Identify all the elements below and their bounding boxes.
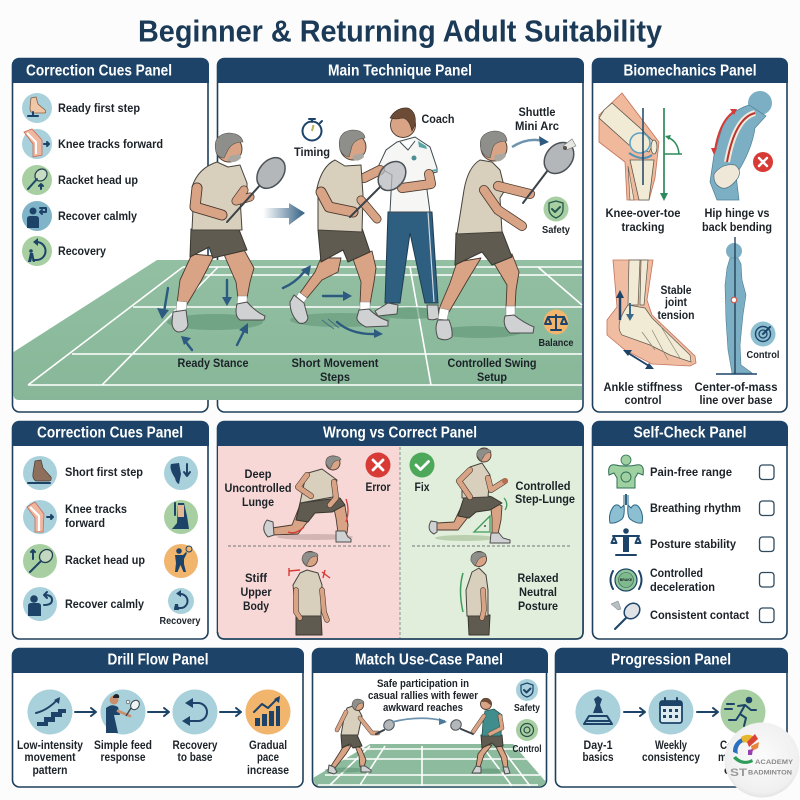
icon: simple feed player — [100, 690, 146, 734]
heading: wrong vs correct: Wrong vs Correct Panel — [323, 424, 477, 442]
icon: balance figure — [612, 528, 640, 555]
label: knee-over-toe tracking — [606, 206, 681, 234]
label: gradual pace increase: increase — [247, 765, 289, 777]
label: short movement steps: Steps — [320, 370, 350, 384]
heading: correction cues: Correction Cues Panel — [26, 62, 172, 80]
icon: short first step — [23, 456, 57, 490]
label: low-intensity movement pattern: Low-intensity — [17, 740, 84, 752]
label: controlled swing setup — [448, 356, 536, 384]
check: controlled deceleration: deceleration — [650, 580, 715, 594]
label: deep uncontrolled lunge: Uncontrolled — [224, 481, 292, 495]
cue: knee tracks forward: Knee tracks forward — [58, 137, 163, 151]
label: shuttle mini arc: Mini Arc — [515, 119, 559, 133]
icon: runner — [720, 690, 766, 734]
figure: controlled swing player — [436, 131, 580, 340]
label: stable joint tension: joint — [664, 297, 687, 309]
arrow: big progression — [263, 203, 305, 225]
cue: knee tracks forward: Knee tracks — [65, 502, 127, 516]
figure: ready stance player — [172, 133, 291, 332]
label: stiff upper body: Stiff — [245, 571, 268, 585]
label: balance: Balance — [538, 337, 574, 349]
icon: low-intensity stairs — [28, 690, 72, 734]
label: stiff upper body: Body — [243, 599, 269, 613]
label: deep uncontrolled lunge: Lunge — [242, 495, 274, 509]
label: deep uncontrolled lunge — [224, 467, 292, 509]
check: posture stability: Posture stability — [650, 537, 736, 551]
label: deep uncontrolled lunge: Deep — [244, 467, 272, 481]
label: short movement steps: Short Movement — [292, 356, 378, 370]
icon: timing stopwatch — [302, 119, 322, 140]
cue: recover calmly: Recover calmly — [65, 597, 144, 611]
label: weekly consistency: consistency — [642, 752, 701, 764]
heading: progression: Progression Panel — [611, 652, 731, 668]
cue: recover calmly: Recover calmly — [58, 209, 137, 223]
label: confident movement: Confident — [720, 740, 766, 752]
figure: relaxed neutral posture — [460, 552, 490, 635]
label: gradual pace increase — [247, 740, 289, 777]
cue: racket head up: Racket head up — [58, 173, 138, 187]
label: ankle stiffness control — [604, 380, 683, 407]
label: ankle stiffness control: Ankle stiffness — [604, 380, 683, 394]
figure: right match player — [449, 698, 510, 774]
icon: ankle support — [164, 456, 198, 490]
label: gradual pace increase: pace — [257, 752, 279, 764]
icon: recovery — [168, 588, 194, 614]
illustration: ankle — [607, 260, 696, 369]
label: confident movement — [718, 740, 768, 777]
arrow — [697, 708, 718, 716]
label: simple feed response: Simple feed — [94, 740, 152, 752]
panel: main technique — [217, 58, 584, 412]
panel: match use-case — [312, 648, 548, 787]
figure: stiff upper body — [289, 552, 330, 635]
label: coach: Coach — [422, 112, 454, 126]
icon: weekly consistency calendar — [648, 690, 694, 734]
label: control: Control — [746, 349, 780, 361]
label: recovery to base: to base — [178, 752, 212, 764]
illustration: center-of-mass line — [716, 237, 757, 374]
label: stable joint tension: Stable — [660, 285, 692, 297]
label: controlled swing setup: Controlled Swing — [448, 356, 536, 370]
label: controlled swing setup: Setup — [477, 370, 507, 384]
icon: recovery to base — [172, 690, 218, 734]
icon: muscle figure — [609, 455, 643, 488]
icon: racket contact — [611, 600, 643, 629]
description: safe participation: casual rallies with fewer — [368, 690, 479, 702]
arrow: match shuttle arc — [392, 718, 447, 725]
logo: st badminton academy — [724, 722, 800, 798]
illustration: knee over toe — [599, 93, 682, 201]
label: relaxed neutral posture — [518, 571, 558, 613]
heading: main technique: Main Technique Panel — [328, 62, 472, 80]
figure: deep lunge — [264, 456, 353, 542]
cue: knee tracks forward — [65, 502, 127, 530]
label: hip hinge vs back bending: back bending — [702, 220, 772, 234]
label: shuttle mini arc — [515, 105, 559, 133]
panel: biomechanics — [592, 58, 788, 412]
panel: self-check — [592, 421, 788, 639]
label: safety: Safety — [542, 224, 570, 236]
check: controlled deceleration — [650, 566, 774, 594]
label: knee-over-toe tracking: Knee-over-toe — [606, 206, 681, 220]
label: recovery: Recovery — [160, 615, 201, 627]
label: stiff upper body: Upper — [240, 585, 272, 599]
icon: brake — [610, 569, 642, 591]
panel: main technique court — [14, 260, 582, 400]
label: confident movement: movement — [718, 752, 768, 764]
label: relaxed neutral posture: Neutral — [519, 585, 557, 599]
icon: brake: BRAKE — [620, 578, 633, 582]
label: recovery to base — [172, 740, 218, 764]
figure: left match player — [325, 699, 396, 774]
icon: gradual pace increase — [246, 690, 290, 734]
check: controlled deceleration: Controlled — [650, 566, 703, 580]
arrow — [624, 708, 645, 716]
label: low-intensity movement pattern — [17, 740, 84, 777]
heading: correction cues lower: Correction Cues Panel — [37, 424, 183, 442]
heading: drill flow: Drill Flow Panel — [108, 652, 208, 668]
icon: racket head up — [22, 165, 52, 195]
title: Beginner & Returning Adult Suitability — [138, 14, 663, 48]
illustration: hip hinge — [710, 91, 773, 200]
label: fix: Fix — [414, 480, 430, 494]
description: safe participation: awkward reaches — [383, 702, 463, 714]
label: low-intensity movement pattern: movement — [24, 752, 76, 764]
logo: st badminton academy: ST — [730, 767, 747, 779]
check: consistent contact: Consistent contact — [650, 608, 749, 622]
label: timing: Timing — [294, 145, 330, 159]
label: hip hinge vs back bending: Hip hinge vs — [704, 206, 770, 220]
label: shuttle mini arc: Shuttle — [518, 105, 556, 119]
icon: ready first step — [22, 93, 52, 123]
label: weekly consistency — [642, 740, 701, 764]
figure: controlled step-lunge — [429, 448, 510, 543]
icon: racket head up — [23, 544, 57, 578]
label: center-of-mass line over base — [694, 380, 778, 407]
label: controlled step-lunge: Step-Lunge — [515, 492, 575, 506]
label: safety: Safety — [514, 702, 540, 714]
icon: recover calmly — [22, 201, 52, 231]
icon: player with racket — [164, 544, 198, 578]
arrow — [220, 708, 241, 716]
label: recovery to base: Recovery — [172, 740, 218, 752]
label: stable joint tension: tension — [658, 310, 694, 322]
label: weekly consistency: Weekly — [655, 740, 687, 752]
label: error: Error — [366, 480, 391, 494]
label: confident movement: clearly — [724, 765, 763, 777]
label: day-1 basics: Day-1 — [584, 740, 613, 752]
cue: recovery: Recovery — [58, 244, 106, 258]
label: short movement steps — [292, 356, 378, 384]
icon: error — [366, 452, 390, 478]
arrows: footwork on court — [157, 265, 383, 350]
label: relaxed neutral posture: Posture — [518, 599, 558, 613]
icon: recover calmly — [23, 587, 57, 621]
icon: lungs — [610, 494, 642, 523]
icon: knee tracks — [22, 129, 52, 159]
label: stiff upper body — [240, 571, 272, 613]
panel: drill flow — [12, 648, 304, 787]
icon: fix — [410, 452, 434, 478]
label: hip hinge vs back bending — [702, 206, 772, 234]
panel: correction cues top — [12, 58, 209, 412]
heading: match use-case: Match Use-Case Panel — [355, 652, 503, 668]
icon: posture support — [164, 500, 198, 534]
check: pain-free range: Pain-free range — [650, 465, 732, 479]
icon: day-1 basics — [576, 690, 620, 734]
label: gradual pace increase: Gradual — [249, 740, 287, 752]
check: breathing rhythm: Breathing rhythm — [650, 501, 741, 515]
icon: knee tracks — [23, 500, 57, 534]
icon: safety — [516, 679, 538, 701]
figure: short movement player — [290, 130, 411, 327]
label: knee-over-toe tracking: tracking — [622, 220, 664, 234]
arrow — [75, 708, 96, 716]
label: controlled step-lunge: Controlled — [516, 479, 570, 493]
label: center-of-mass line over base: line over base — [700, 393, 773, 407]
label: center-of-mass line over base: Center-of-mass — [694, 380, 778, 394]
label: stable joint tension — [658, 285, 694, 322]
cue: short first step: Short first step — [65, 465, 143, 479]
icon: recovery — [22, 236, 52, 266]
label: ankle stiffness control: control — [624, 393, 662, 407]
arrow — [148, 708, 169, 716]
icon: control target — [750, 322, 776, 346]
label: low-intensity movement pattern: pattern — [32, 765, 68, 777]
logo: st badminton academy: ACADEMY — [755, 760, 793, 766]
heading: biomechanics: Biomechanics Panel — [624, 62, 756, 80]
label: day-1 basics — [582, 740, 614, 764]
label: relaxed neutral posture: Relaxed — [518, 571, 558, 585]
icon: safety — [544, 196, 568, 222]
label: ready stance: Ready Stance — [178, 356, 249, 370]
label: control: Control — [512, 743, 542, 755]
arrow: shuttle mini arc — [512, 136, 549, 147]
heading: self-check: Self-Check Panel — [634, 424, 746, 442]
description: safe participation — [368, 678, 479, 714]
check: pain-free range — [650, 465, 774, 480]
panel: correction cues lower — [12, 421, 209, 639]
cue: knee tracks forward: forward — [65, 516, 105, 530]
label: controlled step-lunge — [515, 479, 575, 506]
icon: balance — [544, 310, 568, 334]
label: simple feed response: response — [100, 752, 146, 764]
logo: st badminton academy: BADMINTON — [748, 770, 792, 776]
cue: ready first step: Ready first step — [58, 101, 140, 115]
cue: racket head up: Racket head up — [65, 553, 145, 567]
figure: coach — [364, 108, 439, 320]
label: simple feed response — [94, 740, 152, 764]
description: safe participation: Safe participation in — [377, 678, 469, 690]
panel: wrong vs correct — [217, 421, 584, 639]
label: day-1 basics: basics — [582, 752, 614, 764]
icon: control — [516, 719, 538, 741]
panel: progression — [555, 648, 788, 787]
